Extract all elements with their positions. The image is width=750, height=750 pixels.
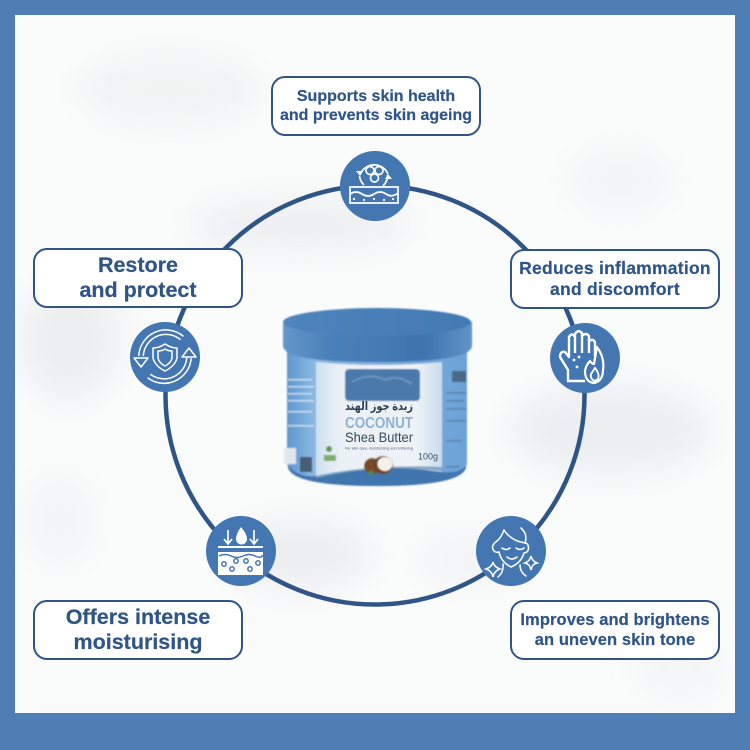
barcode and QR [284,448,296,464]
callout: improves skin tone: Improves and brightens [520,611,710,629]
callout: restore and protect: and protect [79,278,197,302]
callout: restore and protect: Restore [98,253,178,277]
callout: supports skin health: Supports skin health [297,88,455,105]
jar label text: زبدة جوز الهند [345,399,413,414]
callout: reduces inflammation [510,249,720,309]
callout: intense moisturising [33,600,243,660]
callout: intense moisturising: moisturising [73,630,202,654]
callout: improves skin tone: an uneven skin tone [535,631,695,649]
callout: improves skin tone [510,600,720,660]
callout: intense moisturising: Offers intense [66,605,210,629]
jar label text [345,399,438,462]
logo [326,446,332,452]
callout: restore and protect [33,248,243,308]
jar label text: COCONUT [345,415,413,432]
jar lid [283,308,472,362]
jar body [284,350,467,486]
jar label text: Shea Butter [345,429,413,445]
callout: reduces inflammation: and discomfort [550,279,680,299]
jar label text: 100g [418,452,438,462]
jar label text: For skin care, moisturizing and softening [345,446,413,450]
callout: supports skin health: and prevents skin ageing [280,107,472,124]
callout: reduces inflammation: Reduces inflammation [519,258,711,278]
coconut [364,458,380,474]
callout: supports skin health [271,76,481,136]
